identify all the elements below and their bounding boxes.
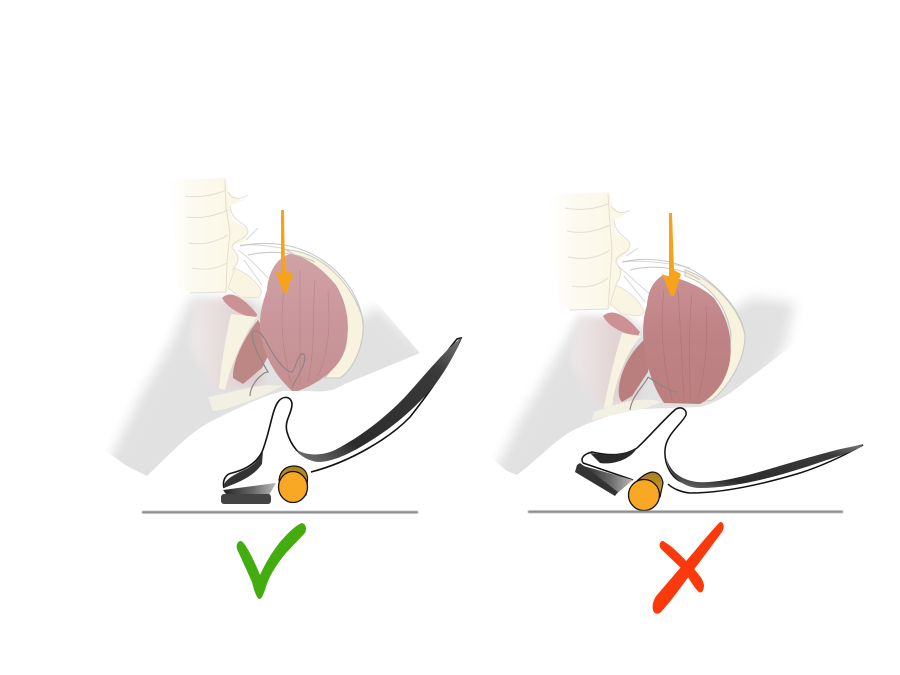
orange force arrow — [275, 210, 293, 294]
large gluteal muscle — [260, 254, 348, 391]
foam band strap — [582, 408, 863, 493]
ground line — [528, 510, 843, 513]
lower small muscle — [619, 337, 649, 402]
small muscle — [222, 295, 257, 318]
skin silhouette — [109, 295, 420, 476]
hamstring loop — [630, 377, 678, 410]
base pad — [221, 494, 271, 504]
base pad — [575, 463, 618, 496]
wedge under strap — [223, 483, 276, 497]
pelvis flesh shading — [570, 316, 640, 406]
orange force arrow — [662, 213, 681, 296]
infographic: correct and incorrect foot roller technique — [109, 178, 864, 614]
spine vertebrae — [549, 192, 630, 310]
green check mark — [237, 523, 306, 599]
orange roller — [628, 472, 663, 510]
pelvic rim — [286, 250, 363, 378]
hamstring loop — [250, 331, 305, 396]
large gluteal muscle — [643, 275, 731, 404]
sit bone — [592, 400, 662, 420]
small muscle — [603, 313, 640, 336]
wedge under strap — [580, 465, 633, 495]
skin silhouette — [496, 294, 796, 475]
lower small muscle — [233, 320, 270, 384]
ground line — [142, 511, 418, 514]
outer pelvic rim line — [622, 259, 745, 335]
foam band strap — [223, 338, 461, 488]
cream tendon band — [219, 314, 257, 390]
pelvic rim — [685, 270, 745, 402]
orange roller — [278, 466, 308, 502]
red cross mark — [653, 522, 724, 614]
outer pelvic rim line — [240, 243, 363, 325]
left scene: correct technique — [95, 178, 461, 599]
sacral bone and ligaments — [228, 228, 290, 298]
spine vertebrae — [168, 178, 248, 293]
right scene: incorrect technique — [485, 192, 863, 614]
cream tendon band — [604, 333, 641, 408]
sit bone — [208, 385, 282, 411]
pelvis flesh shading — [190, 300, 262, 390]
sacral bone and ligaments — [610, 248, 690, 316]
